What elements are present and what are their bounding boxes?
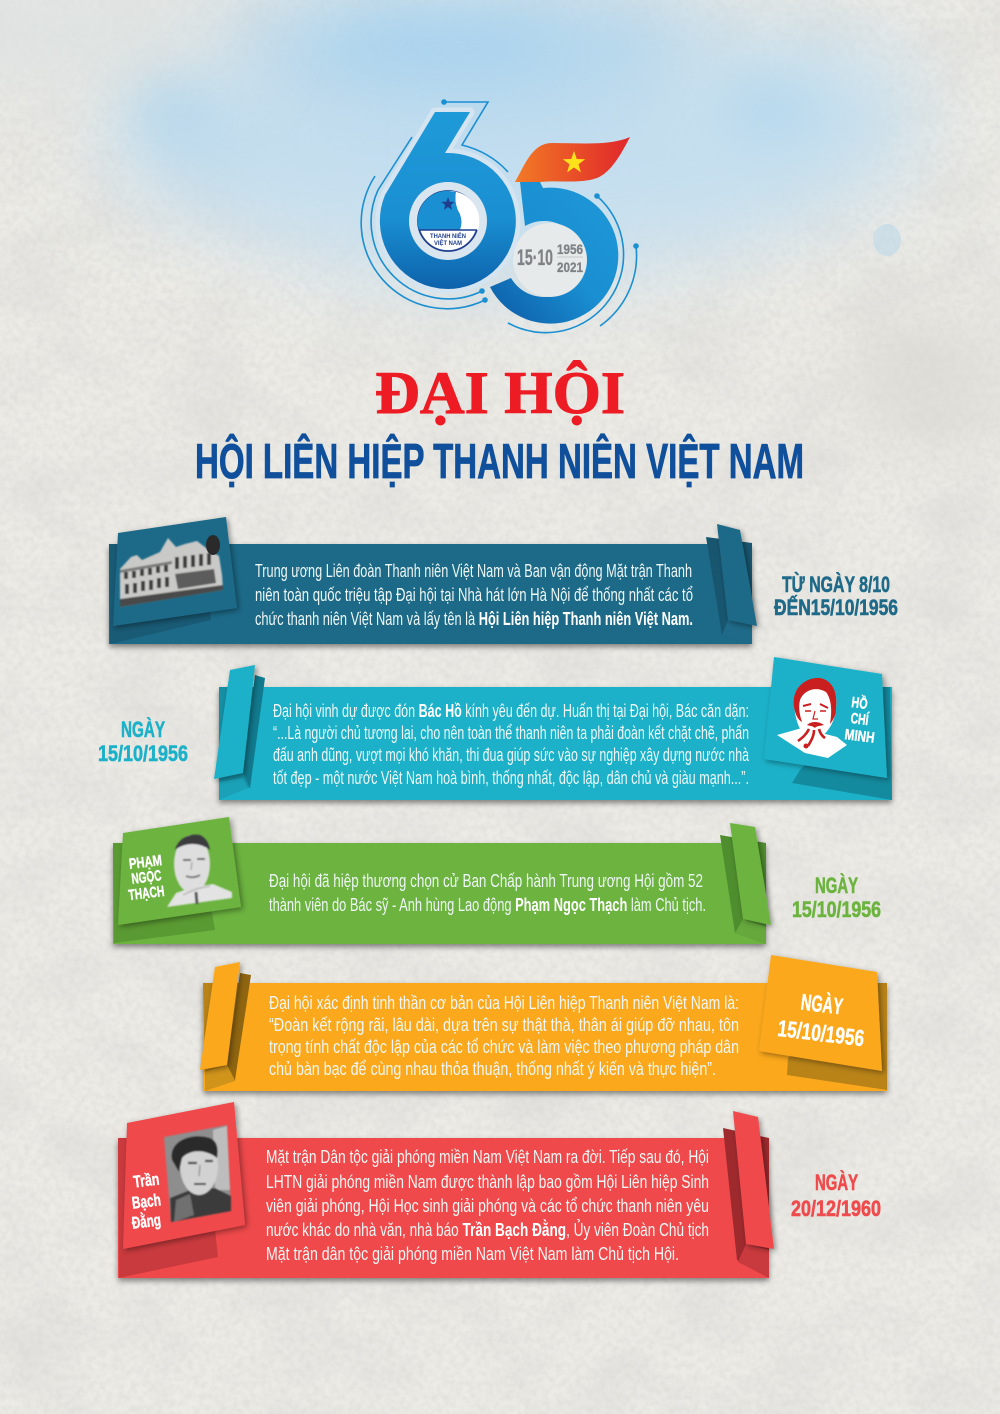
date label: 15/10/1956 [792,897,881,922]
body text [273,701,750,788]
youth union badge [418,191,479,251]
body text: thành viên do Bác sỹ - Anh hùng Lao động Phạm Ngọc Thạch làm Chủ tịch. [269,895,706,915]
name label: Bạch [131,1190,162,1213]
date label: NGÀY [815,1170,858,1195]
ribbon body [200,962,887,1091]
date label [791,1170,881,1221]
panel: event 3, green ribbon [113,817,881,944]
anniversary date: 15·10 [517,245,553,270]
body text: “Đoàn kết rộng rãi, lâu dài, dựa trên sự thật thà, thân ái giúp đỡ nhau, tôn [269,1015,739,1035]
anniversary date: 2021 [557,259,583,275]
youth union badge: VIỆT NAM [434,239,462,247]
body text: “...Là người chủ tương lai, cho nên toàn thể thanh niên ta phải đoàn kết chặt chẽ, phấn [273,723,749,743]
thin orbit lines [361,102,637,333]
title: ĐẠI HỘI [375,360,625,426]
name label: HỒ [851,693,869,713]
date label [774,572,898,620]
anniversary date: 1956 [557,241,583,257]
center disc of 5 [513,223,587,297]
body text: tốt đẹp - một nước Việt Nam hoà bình, thống nhất, độc lập, dân chủ và giàu mạnh...”. [273,768,749,788]
name label [128,852,165,904]
youth union badge: THANH NIÊN [430,232,466,240]
name label [131,1170,162,1233]
name label: CHÍ [850,710,870,729]
date card: NGÀY [800,988,845,1020]
body text [255,561,693,629]
date label: 15/10/1956 [98,741,188,766]
name label [844,693,875,747]
panel: event 4, orange ribbon [200,955,887,1091]
name label: Đằng [131,1210,162,1233]
portrait card: Pham Ngoc Thach [118,817,241,925]
photo card: Hanoi Opera House [113,517,237,626]
logo: 65 years [361,99,639,333]
ribbon body [118,1111,774,1278]
date card: 15/10/1956 [776,1015,866,1051]
ribbon body [109,524,757,644]
ribbon body [113,823,771,944]
body text: Mặt trận dân tộc giải phóng miền Nam Việt Nam làm Chủ tịch Hội. [266,1244,679,1264]
name label: NGỌC [131,867,162,888]
numeral 6 [380,112,516,289]
date label: ĐẾN15/10/1956 [774,595,898,620]
date label: 20/12/1960 [791,1196,881,1221]
date label [98,717,188,766]
date card [759,955,882,1071]
body text: Trung ương Liên đoàn Thanh niên Việt Nam và Ban vận động Mặt trận Thanh [255,561,692,581]
body text: nước khác do nhà văn, nhà báo Trần Bạch Đằng, Ủy viên Đoàn Chủ tịch [266,1219,709,1240]
panel: event 1, dark teal ribbon [109,517,898,644]
date label [792,873,881,922]
body text: viên giải phóng, Hội Học sinh giải phóng và các tổ chức thanh niên yêu [266,1196,709,1216]
portrait card: Ho Chi Minh [764,657,887,778]
name label: THẠCH [128,883,165,904]
date label: NGÀY [815,873,858,898]
body text: chức thanh niên Việt Nam và lấy tên là Hội Liên hiệp Thanh niên Việt Nam. [255,609,693,629]
name label: PHẠM [128,852,163,873]
anniversary date [517,241,583,275]
numeral 5 [490,182,618,324]
body text: LHTN giải phóng miền Nam được thành lập bao gồm Hội Liên hiệp Sinh [266,1172,709,1192]
body text: đấu anh dũng, vượt mọi khó khăn, thi đua giúp sức vào sự nghiệp xây dựng nước nhà [273,745,750,765]
body text: trọng tính chất độc lập của các tổ chức và làm việc theo phương pháp dân [269,1037,739,1057]
panel: event 5, red ribbon [118,1102,881,1278]
body text [269,993,739,1079]
name label: Trần [132,1170,160,1192]
panel: event 2, cyan ribbon [98,657,892,800]
date label: NGÀY [121,717,165,742]
flag [515,137,630,182]
ribbon body [214,665,892,800]
body text [269,871,706,915]
name label: MINH [844,726,875,747]
body text: Đại hội xác định tinh thần cơ bản của Hội Liên hiệp Thanh niên Việt Nam là: [269,993,739,1013]
body text: Mặt trận Dân tộc giải phóng miền Nam Việt Nam ra đời. Tiếp sau đó, Hội [266,1147,709,1167]
body text: Đại hội vinh dự được đón Bác Hồ kính yêu đến dự. Huấn thị tại Đại hội, Bác căn dặn: [273,701,749,721]
body text: niên toàn quốc triệu tập Đại hội tại Nhà hát lớn Hà Nội để thống nhất các tổ [255,585,693,605]
portrait card: Tran Bach Dang [123,1102,245,1249]
body text: Đại hội đã hiệp thương chọn cử Ban Chấp hành Trung ương Hội gồm 52 [269,871,703,891]
body text [266,1147,709,1264]
body text: chủ bàn bạc để cùng nhau thỏa thuận, thống nhất ý kiến và thực hiện”. [269,1059,716,1079]
date label: TỪ NGÀY 8/10 [782,572,890,597]
